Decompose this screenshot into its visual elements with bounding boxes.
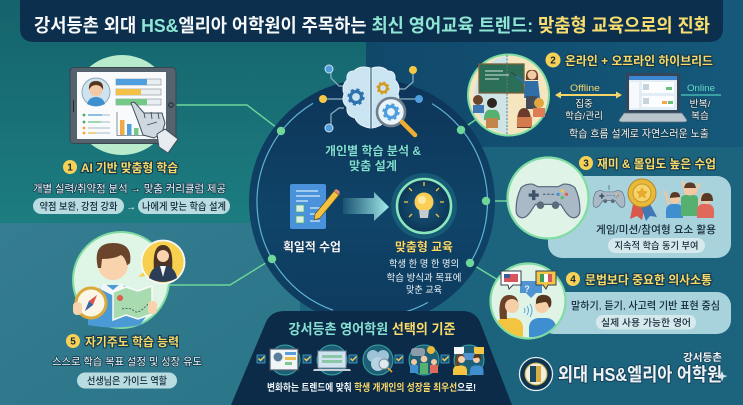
connector lines — [168, 105, 512, 285]
text 3: 게임/미션/참여형 요소 활용 — [596, 223, 716, 236]
logo small text: 강서등촌 — [683, 351, 722, 364]
pill: strengths: 약점 보완, 강점 강화 — [40, 200, 118, 213]
badge 3: 3 — [583, 158, 589, 170]
badge 5: 5 — [70, 336, 76, 348]
heading 5: 자기주도 학습 능력 — [85, 334, 179, 349]
icon: light bulb — [391, 173, 457, 239]
caption 2: 학습 흐름 설계로 자연스러운 노출 — [569, 128, 709, 140]
icon: medal — [628, 179, 657, 221]
pill: design: 나에게 맞는 학습 설계 — [142, 200, 226, 213]
description: personalised education: 맞춘 교육 — [406, 284, 442, 296]
offline description — [565, 98, 603, 122]
badge 5 — [66, 334, 80, 348]
heading 1: AI 기반 맞춤형 학습 — [81, 160, 178, 175]
pill 4 — [596, 315, 696, 330]
description: personalised education: 학습 방식과 목표에 — [386, 272, 462, 284]
section 5: self-directed learning — [52, 232, 202, 388]
sparkle — [716, 371, 728, 382]
illustration: student with compass and map — [73, 232, 184, 328]
section 4: communication — [490, 264, 731, 338]
heading: criteria: 강서등촌 영어학원 선택의 기준 — [288, 321, 456, 337]
illustration: conversation — [490, 264, 566, 338]
check marks — [258, 356, 448, 360]
badge 1 — [63, 160, 77, 174]
online description: 복습 — [691, 111, 709, 122]
logo name: 외대 HS&엘리아 어학원 — [558, 364, 722, 385]
description: personalised education: 학생 한 명 한 명의 — [389, 258, 459, 270]
arrow: double — [555, 92, 622, 98]
pill: teacher guide: 선생님은 가이드 역할 — [87, 374, 167, 388]
panel 4 — [540, 292, 731, 334]
description 1: 개별 실력/취약점 분석 → 맞춤 커리큘럼 제공 — [33, 182, 226, 195]
pill 3: 지속적 학습 동기 부여 — [614, 240, 698, 252]
icon: cheering students — [665, 182, 714, 218]
online description — [690, 99, 711, 122]
tagline: 변화하는 트렌드에 맞춰 학생 개개인의 성장을 최우선으로! — [267, 381, 476, 394]
section 2: hybrid — [468, 52, 721, 140]
description: personalised education — [386, 258, 462, 296]
central circle — [249, 79, 495, 325]
badge 4: 4 — [570, 274, 576, 286]
check icons — [257, 355, 449, 363]
illustration: classroom — [468, 54, 549, 136]
label: personalised education: 맞춤형 교육 — [395, 239, 453, 254]
badge 1: 1 — [67, 162, 73, 174]
offline description: 집중 — [575, 98, 593, 110]
offline description: 학습/관리 — [565, 111, 603, 122]
arrow — [343, 192, 389, 221]
icon: small gamepad — [593, 185, 625, 207]
online line — [681, 94, 721, 96]
icon row — [270, 345, 484, 375]
section 1: AI personalised learning — [33, 55, 230, 214]
illustration: conversation: ? — [524, 284, 530, 294]
icon: tablet with robot hand — [70, 55, 178, 155]
heading 3: 재미 & 몰입도 높은 수업 — [597, 156, 716, 171]
badge 2: 2 — [550, 56, 556, 66]
online description: 반복/ — [690, 99, 711, 110]
heading 2: 온라인 + 오프라인 하이브리드 — [565, 54, 713, 68]
panel: selection criteria — [231, 311, 512, 405]
arrow: → — [126, 202, 136, 213]
badge 3 — [579, 156, 593, 170]
label: online: Online — [687, 83, 715, 94]
panel 3 — [548, 176, 731, 258]
icon: gamepad circle — [508, 158, 588, 238]
icon: laptop — [619, 73, 687, 122]
title text: 강서등촌 외대 HS&엘리아 어학원이 주목하는 최신 영어교육 트렌드: 맞춤형 교육으로의 진화 — [34, 15, 710, 36]
connector nodes — [268, 126, 490, 267]
label: uniform classes: 획일적 수업 — [283, 240, 341, 254]
badge 4 — [566, 272, 580, 286]
pill 4: 실제 사용 가능한 영어 — [601, 317, 691, 329]
section 3: fun and engagement — [508, 156, 731, 258]
logo emblem — [520, 358, 552, 390]
pill: strengths — [33, 198, 124, 214]
pill: teacher guide — [77, 372, 177, 388]
label: design: 맞춤 설계 — [349, 159, 397, 173]
label: analysis: 개인별 학습 분석 & — [325, 143, 421, 158]
logo: academy — [520, 351, 728, 390]
badge 2 — [546, 52, 560, 68]
heading 4: 문법보다 중요한 의사소통 — [585, 272, 712, 287]
text 4: 말하기, 듣기, 사고력 기반 표현 중심 — [571, 299, 720, 312]
speech bubble: teacher — [138, 240, 184, 284]
icon: brain — [319, 65, 423, 135]
description 5: 스스로 학습 목표 설정 및 성장 유도 — [52, 356, 202, 368]
centre: analysis and personalised education — [283, 65, 462, 296]
icon: document and pencil — [290, 184, 340, 229]
label: offline: Offline — [570, 83, 600, 94]
pill: design — [138, 198, 230, 214]
title banner — [20, 0, 723, 42]
pill 3 — [608, 238, 705, 253]
